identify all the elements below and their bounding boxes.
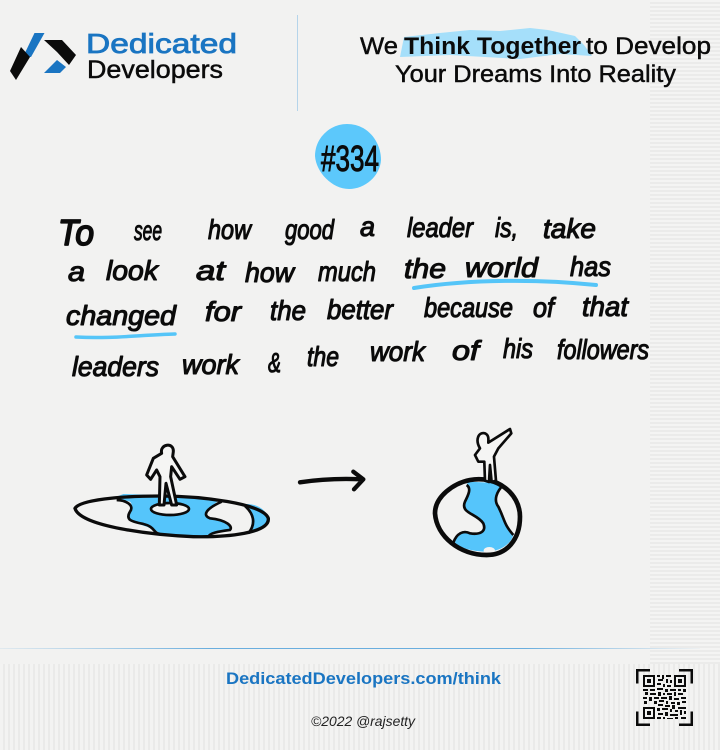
line 1: To [58,212,94,253]
line 4: work [182,349,241,380]
line 4: & [268,347,281,378]
QR modules [643,675,686,719]
footer rule [0,648,700,649]
line 2: much [318,256,376,287]
tagline [360,28,711,88]
logo wordmark [86,28,237,84]
line 1: take [543,213,596,244]
line 1: leader [407,212,474,243]
line 4 [72,333,649,382]
line 3: the [270,295,306,326]
logo mark [10,33,76,80]
illustration: person on flat world [75,445,268,537]
logo wordmark: Developers [87,56,223,84]
footer link: DedicatedDevelopers.com/think [226,669,502,688]
line 4: the [307,341,339,372]
tagline: Your Dreams Into Reality [395,61,676,88]
line 3: for [205,296,243,327]
line 2: world [465,252,540,283]
line 1: good [285,214,335,245]
QR corner brackets [636,669,693,726]
line 4: of [452,335,483,366]
globe land [455,482,513,552]
line 2: the [404,253,446,284]
line 3: changed [66,300,177,331]
line 4: work [370,336,427,367]
line 2: look [106,255,160,286]
logo wordmark: Dedicated [86,28,237,59]
highlight underlines [414,281,596,288]
header divider [297,15,298,111]
tagline: We [360,33,398,60]
line 4: leaders [72,351,159,382]
brush highlight [400,28,592,59]
arrow [300,472,363,489]
QR code [636,669,693,726]
globe outline [435,479,520,555]
line 4: his [503,333,533,364]
line 2: how [245,257,296,288]
logo: Dedicated Developers [10,28,237,84]
person [147,445,185,505]
tagline: Think Together [404,33,581,60]
line 2 [68,251,611,288]
flat world outline [75,496,268,537]
line 3: because [424,292,513,323]
quote text [58,211,649,382]
island [151,503,189,515]
globe bump [484,547,495,554]
line 3 [66,291,629,331]
badge #334: #334 [321,138,379,179]
illustration: person on round globe [435,429,520,555]
badge #334 [315,124,381,189]
line 1: see [134,215,162,246]
line 4: followers [557,334,649,365]
line 1: a [360,211,375,242]
line 3: that [582,291,629,322]
line 3: better [327,294,395,325]
line 2: a [68,256,85,287]
line 2: has [570,251,611,282]
line 2: at [196,255,227,286]
line 3: of [533,292,557,323]
line 1 [58,211,596,253]
flat world land [118,494,231,536]
person pointing [475,429,511,482]
line 1: is, [495,212,518,243]
line 1: how [208,214,252,245]
tagline: to Develop [586,33,711,60]
copyright: ©2022 @rajsetty [311,713,416,729]
